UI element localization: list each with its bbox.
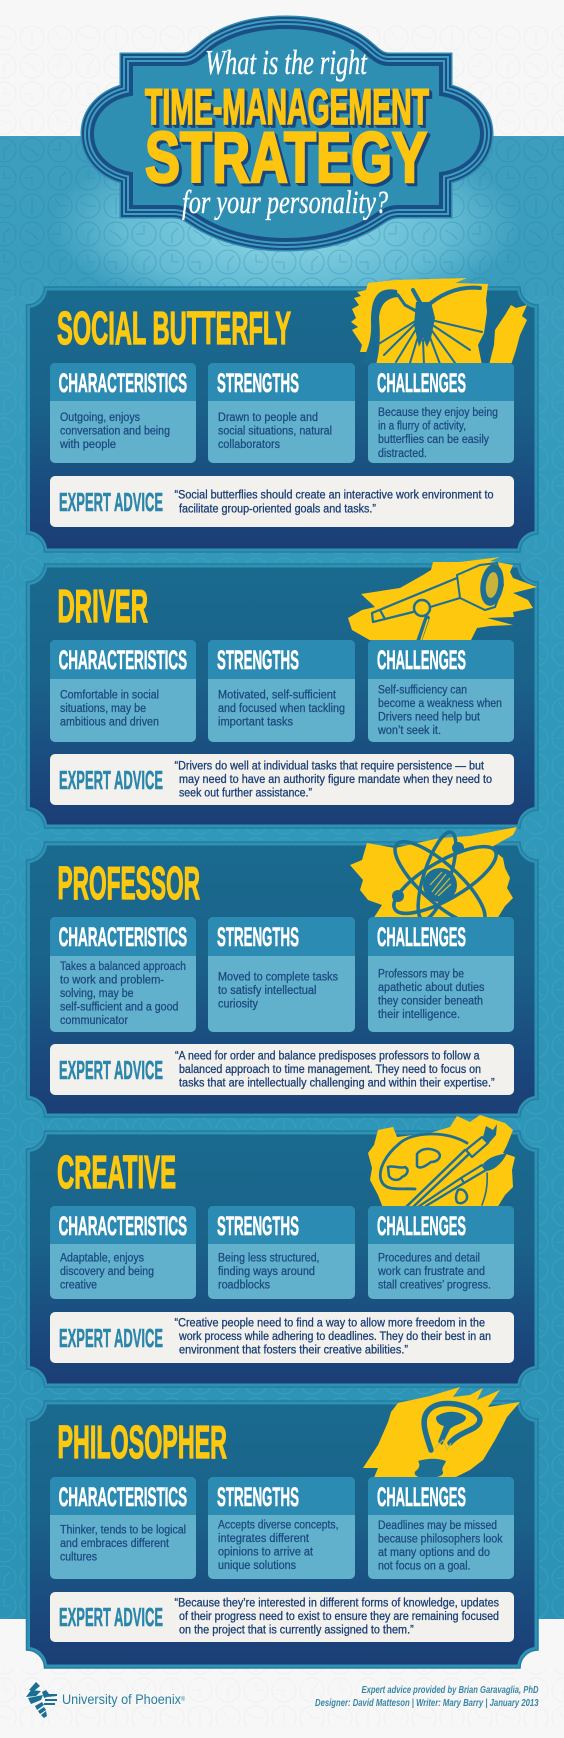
text: characteristics: conversation and being [60,424,170,438]
panel: social butterfly [26,278,538,552]
quote [174,758,492,800]
text: characteristics: Comfortable in social [60,688,159,702]
text: strengths [218,1518,338,1572]
text: challenges [378,966,484,1021]
text: strengths: integrates different [218,1531,310,1545]
card: strengths [208,363,355,463]
text: strengths: unique solutions [218,1558,296,1572]
text: characteristics: ambitious and driven [60,714,159,728]
text: strengths [218,1250,320,1292]
text: characteristics: Takes a balanced approach [60,959,186,973]
text: characteristics: to work and problem- [60,972,164,986]
text: strengths: finding ways around [218,1264,315,1278]
text: characteristics [60,1522,186,1564]
text: strengths: and focused when tackling [218,701,345,715]
card: challenges: CHALLENGES [377,368,466,398]
card: challenges: CHALLENGES [377,922,466,952]
expert advice [50,754,514,805]
text: challenges [378,405,498,460]
text: challenges: Because they enjoy being [378,405,498,419]
quote: “Social butterflies should create an interactive work environment to [174,488,494,502]
quote: “Creative people need to find a way to allow more freedom in the [174,1316,485,1330]
text: characteristics: Adaptable, enjoys [60,1250,144,1264]
title badge [92,27,482,240]
text: challenges [377,682,502,737]
card: characteristics: CHARACTERISTICS [59,368,187,398]
text: challenges: Self-sufficiency can [378,682,467,696]
text: challenges: stall creatives’ progress. [378,1278,491,1292]
card: challenges: CHALLENGES [377,1211,466,1241]
expert advice [50,476,514,527]
card: characteristics [50,363,196,463]
card: characteristics: CHARACTERISTICS [59,1482,187,1512]
text: challenges: become a weakness when [378,696,502,710]
text: strengths: Accepts diverse concepts, [218,1518,338,1532]
card: challenges [368,1206,514,1299]
wordmark: ® [181,1696,186,1703]
card: characteristics [50,1477,196,1579]
card: strengths: STRENGTHS [217,1211,299,1241]
text: characteristics: creative [60,1278,97,1292]
icon: butterfly [351,278,527,365]
card: characteristics: CHARACTERISTICS [59,922,187,952]
badge shape [92,27,482,240]
text: challenges [378,1518,503,1572]
expert advice: EXPERT ADVICE [59,1602,163,1632]
text: challenges: Professors may be [378,966,464,980]
text: challenges: because philosophers look [378,1532,503,1546]
panel: creative [26,1115,538,1387]
card: strengths [208,917,355,1032]
text: strengths: roadblocks [218,1278,270,1292]
text: challenges: distracted. [378,446,427,460]
card: challenges: CHALLENGES [377,645,466,675]
quote: on the project that is currently assigned to them.” [179,1622,414,1636]
title line: what is the right: What is the right [205,43,368,82]
text: strengths [218,688,345,728]
expert advice: EXPERT ADVICE [59,765,163,795]
text: characteristics: communicator [60,1013,128,1027]
quote: seek out further assistance.” [179,786,312,800]
icon: phoenix [26,1682,57,1718]
text: characteristics [60,688,159,728]
expert advice [50,1312,514,1363]
text: characteristics: discovery and being [60,1264,154,1278]
text: strengths: Motivated, self-sufficient [218,688,337,702]
text: challenges: not focus on a goal. [378,1558,470,1572]
text: challenges: won’t seek it. [377,723,441,737]
text: strengths: social situations, natural [218,424,332,438]
icon: light bulb [363,1387,520,1480]
expert advice: EXPERT ADVICE [59,487,163,517]
card: strengths [208,1206,355,1299]
text: challenges: Procedures and detail [378,1250,480,1264]
credits [315,1685,539,1709]
panel: professor [26,827,538,1117]
expert advice: EXPERT ADVICE [59,1323,163,1353]
text: characteristics [59,410,170,451]
text: strengths: important tasks [218,714,293,728]
text: challenges [377,1250,491,1292]
card: challenges: CHALLENGES [377,1482,466,1512]
card: strengths: STRENGTHS [217,368,299,398]
text: challenges: their intelligence. [378,1007,460,1021]
text: challenges: at many options and do [378,1545,490,1559]
quote: “Drivers do well at individual tasks that require persistence — but [174,758,485,772]
logo: university of phoenix [26,1682,186,1718]
text: strengths: Drawn to people and [218,410,318,424]
text: characteristics [60,1250,154,1292]
text: strengths: curiosity [218,996,259,1010]
quote: “A need for order and balance predisposes professors to follow a [175,1048,480,1062]
text: challenges: they consider beneath [378,994,483,1008]
heading: creative: CREATIVE [57,1146,176,1198]
quote [174,488,494,516]
quote: of their progress need to exist to ensure they are remaining focused [179,1609,499,1623]
card: characteristics: CHARACTERISTICS [59,1211,187,1241]
card: strengths [208,1477,355,1579]
text: strengths [218,970,338,1010]
text: strengths: Moved to complete tasks [218,970,338,984]
quote: balanced approach to time management. They need to focus on [179,1062,481,1076]
quote: “Because they’re interested in different forms of knowledge, updates [174,1596,499,1610]
card: characteristics [50,640,196,742]
text: characteristics: self-sufficient and a good [60,1000,179,1014]
heading: driver: DRIVER [58,580,148,632]
text: strengths: to satisfy intellectual [218,983,316,997]
text: challenges: Deadlines may be missed [378,1518,497,1532]
quote: environment that fosters their creative abilities.” [179,1342,408,1356]
text: strengths [218,410,332,451]
text: characteristics [60,959,186,1027]
text: strengths: Being less structured, [218,1250,320,1264]
text: strengths: collaborators [218,437,280,451]
text: characteristics: cultures [60,1550,97,1564]
quote [174,1596,499,1636]
card: characteristics [50,917,196,1032]
card: strengths: STRENGTHS [217,922,299,952]
quote: work process while adhering to deadlines. They do their best in an [178,1329,491,1343]
heading: philosopher: PHILOSOPHER [58,1416,227,1468]
panel: driver [26,557,538,828]
text: challenges: work can frustrate and [377,1264,485,1278]
title line: strategy: STRATEGY [145,119,427,198]
card: challenges [368,640,514,742]
wordmark: University of Phoenix [62,1691,194,1707]
card: strengths: STRENGTHS [217,1482,299,1512]
text: challenges: in a flurry of activity, [378,418,466,432]
expert advice [50,1592,514,1642]
text: characteristics: with people [59,437,116,451]
icon: telescope [348,557,537,644]
expert advice [50,1044,514,1095]
quote [175,1048,495,1090]
quote: may need to have an authority figure mandate when they need to [179,772,492,786]
heading: social butterfly: SOCIAL BUTTERFLY [57,302,291,354]
text: characteristics: and embraces different [60,1536,169,1550]
card: characteristics [50,1206,196,1299]
quote: tasks that are intellectually challenging and within their expertise.” [179,1076,495,1090]
text: characteristics: Thinker, tends to be logical [60,1522,186,1536]
panel: professor: PROFESSOR [58,857,200,909]
text: challenges: Drivers need help but [378,710,481,724]
text: strengths: opinions to arrive at [218,1544,314,1558]
card: strengths [208,640,355,742]
card: challenges [368,1477,514,1579]
text: characteristics: solving, may be [60,986,134,1000]
card: challenges [368,917,514,1032]
card: characteristics: CHARACTERISTICS [59,645,187,675]
card: challenges [368,363,514,463]
text: challenges: butterflies can be easily [378,432,490,446]
icon: atom [350,827,517,917]
panel: philosopher [26,1387,538,1668]
text: challenges: apathetic about duties [378,980,484,994]
title line: for your personality: for your personality? [182,185,388,221]
icon: palette [368,1115,515,1208]
quote: facilitate group-oriented goals and tasks.” [179,502,376,516]
text: characteristics: situations, may be [60,701,146,715]
expert advice: EXPERT ADVICE [59,1055,163,1085]
quote [174,1316,491,1356]
text: characteristics: Outgoing, enjoys [60,410,140,424]
card: strengths: STRENGTHS [217,645,299,675]
